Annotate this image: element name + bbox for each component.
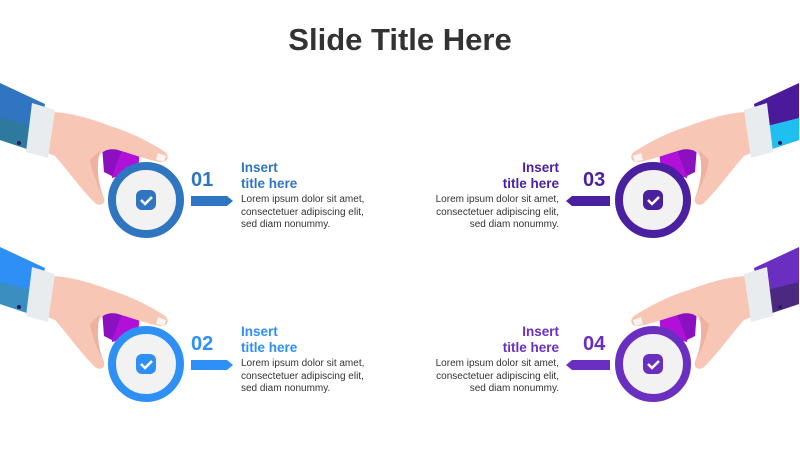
group 2: 02: [191, 333, 213, 355]
hand 1: [26, 103, 168, 205]
group 4: [566, 247, 799, 398]
text: sed diam nonummy.: [241, 383, 330, 394]
text 3: Insert: [522, 160, 559, 175]
text: sed diam nonummy.: [470, 219, 559, 230]
number 01: 01: [191, 169, 213, 191]
text 2: Insert: [241, 324, 278, 339]
text: consectetuer adipiscing elit,: [241, 206, 364, 218]
text 1: Insert: [241, 160, 278, 175]
text: Lorem ipsum dolor sit amet,: [241, 194, 364, 205]
text 4: [502, 324, 559, 355]
text: Lorem ipsum dolor sit amet,: [241, 358, 364, 369]
text 4: Insert: [522, 324, 559, 339]
text: consectetuer adipiscing elit,: [436, 370, 559, 382]
icon 3: [643, 190, 663, 210]
group 3: [566, 83, 799, 234]
group 2: [0, 247, 233, 398]
text: consectetuer adipiscing elit,: [241, 370, 364, 382]
icon 4: [643, 354, 663, 374]
group 1: [0, 83, 233, 234]
text: 04: [583, 333, 606, 355]
arrow 1: [191, 196, 233, 206]
text 3: [502, 160, 559, 191]
text 4: title here: [503, 340, 559, 355]
text: sed diam nonummy.: [470, 383, 559, 394]
text 2: [241, 324, 297, 355]
text: Lorem ipsum dolor sit amet,: [436, 194, 559, 205]
text 2: title here: [241, 340, 297, 355]
title: Slide Title Here: [288, 22, 512, 57]
text: sed diam nonummy.: [241, 219, 330, 230]
sleeve 1: [0, 83, 45, 152]
text 1: title here: [241, 176, 297, 191]
text: 03: [583, 169, 605, 191]
text: Lorem ipsum dolor sit amet,: [436, 358, 559, 369]
text 3: title here: [503, 176, 559, 191]
text: consectetuer adipiscing elit,: [436, 206, 559, 218]
text 1: [241, 160, 297, 191]
circle 1: [112, 166, 180, 234]
